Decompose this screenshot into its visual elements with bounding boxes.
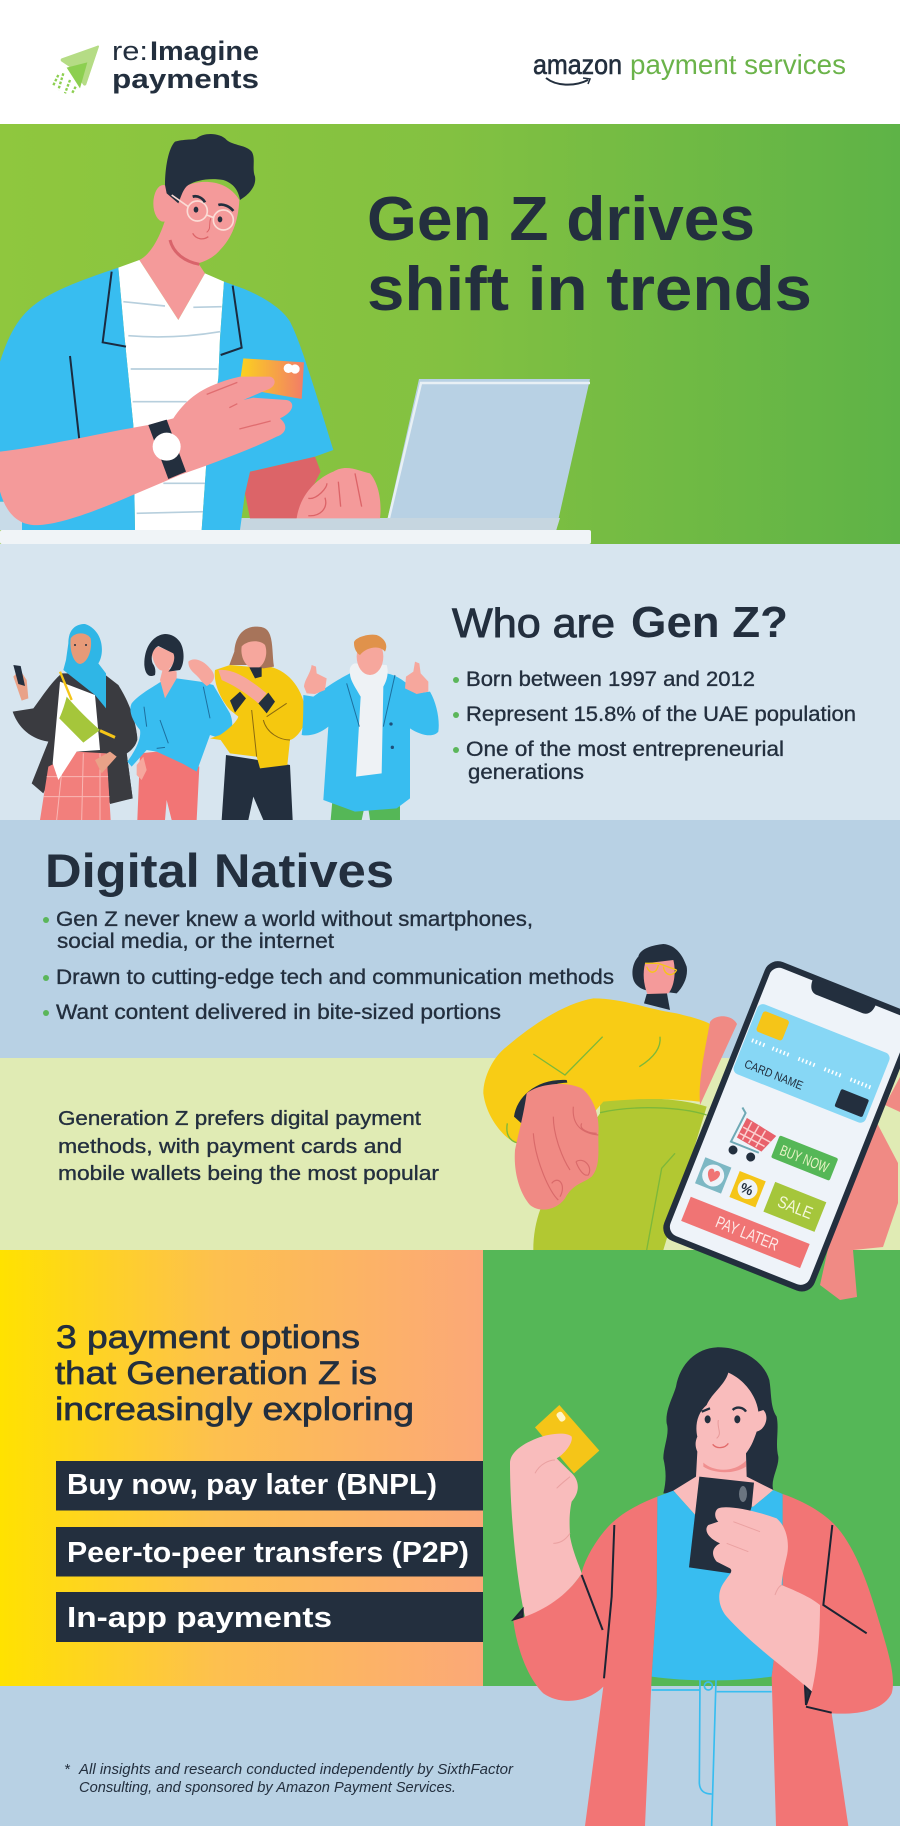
footnote: All insights and research conducted independently by SixthFactor [78,1761,514,1778]
option bar: in-app: In-app payments [67,1602,332,1634]
heading: digital natives: Digital Natives [45,844,394,897]
icon: percent badge [729,1171,766,1207]
heading: 3 payment options [55,1319,414,1427]
panel: who are gen z background [0,544,900,820]
logo: amazon payment services: amazon [533,49,622,80]
bullets: digital natives: Gen Z never knew a world without smartphones, [56,908,533,931]
green trousers [533,1098,707,1250]
logo: re:Imagine payments: re: [112,36,148,66]
neck and head [139,134,255,320]
person: blue jacket thumbs up [302,635,439,820]
striped t-shirt [118,260,224,530]
bullets: digital natives: Want content delivered in bite-sized portions [56,1001,501,1024]
button: buy now: BUY NOW [777,1142,831,1177]
option bar: BNPL: Buy now, pay later (BNPL) [67,1469,437,1501]
option bar: P2P [56,1527,483,1576]
illustration: group of four young people [13,624,439,820]
sweater details [507,1037,707,1250]
black phone [689,1477,754,1573]
face and neck [673,1373,773,1517]
icon: percent badge: % [738,1179,756,1199]
footnote [64,1761,514,1796]
person: black bob hair [127,634,232,820]
bullets: who are gen z: generations [468,761,584,784]
icon: heart tile [695,1157,731,1194]
yellow card [535,1405,599,1473]
smartphone [659,957,900,1296]
cardigan lines [514,1525,867,1713]
heading: who are gen z: Who are [452,600,615,646]
logo: re:Imagine payments: payments [112,64,259,94]
credit card on screen: CARD NAME [742,1057,805,1093]
logo: amazon payment services: payment services [630,49,846,80]
text block: digital payment preference: mobile wallets being the most popular [58,1163,439,1185]
panel: green hero [0,124,900,544]
blue top [652,1490,783,1680]
panel: green right [483,1250,900,1686]
far arm [245,457,321,518]
arm and hand [0,377,292,525]
hair [663,1347,778,1493]
typing hand [297,468,381,518]
footnote: * [64,1761,71,1778]
icon: green arrow [53,46,99,94]
heading: 3 payment options: 3 payment options [56,1319,360,1355]
illustration: person holding phone [483,944,900,1300]
hand on hip [515,1084,599,1210]
bullets: who are gen z: Born between 1997 and 2012 [466,668,755,691]
header band [0,0,900,124]
wrist band [514,1080,567,1127]
credit card on screen [732,1002,891,1125]
raised arm and hand [510,1434,582,1617]
shopping cart [725,1107,781,1167]
bullets: digital natives: social media, or the internet [57,930,334,953]
blue jacket [0,268,333,530]
heading: 3 payment options: increasingly exploring [55,1391,414,1427]
illustration: woman with card and phone [510,1347,893,1826]
payment card [240,358,304,399]
logo: amazon payment services [533,49,846,85]
jeans [652,1680,772,1826]
button: pay later [681,1197,810,1268]
panel: payment options gradient [0,1250,483,1686]
text block: digital payment preference [58,1108,439,1185]
hero title [367,185,812,324]
hero title: shift in trends [367,255,812,324]
person: hijab woman [13,624,137,820]
option bar: P2P: Peer-to-peer transfers (P2P) [67,1537,469,1569]
panel: digital natives background [0,820,900,1058]
heading: who are gen z: Gen Z? [631,598,788,647]
button: sale: SALE [775,1192,815,1223]
illustration: man with laptop and card [0,134,591,544]
bullets: who are gen z: One of the most entrepreneurial [466,738,784,761]
sleeve shadow patch [0,502,22,530]
panel: footer background [0,1686,900,1826]
logo: re:Imagine payments [53,36,259,94]
logo: re:Imagine payments: Imagine [150,36,259,66]
person: yellow jacket [210,627,306,820]
button: buy now [771,1135,838,1181]
button: sale [763,1182,826,1232]
hand and forearm with phone [706,1507,820,1692]
footnote: Consulting, and sponsored by Amazon Payment Services. [79,1779,456,1796]
heading: who are gen z [452,598,788,647]
head [632,944,687,1010]
yellow sweater [483,998,710,1143]
option bar: in-app [56,1592,483,1642]
bullets: digital natives: Drawn to cutting-edge tech and communication methods [56,966,614,989]
text block: digital payment preference: Generation Z prefers digital payment [58,1108,421,1130]
bullets: digital natives [43,908,614,1024]
laptop [0,379,591,544]
cardigan [513,1494,893,1826]
holding hand behind phone [700,1016,900,1300]
option bar: BNPL [56,1461,483,1510]
hero title: Gen Z drives [367,185,755,254]
bullets: who are gen z [453,668,856,784]
heading: 3 payment options: that Generation Z is [55,1355,377,1391]
text block: digital payment preference: methods, with payment cards and [58,1136,402,1158]
bullets: who are gen z: Represent 15.8% of the UAE population [466,703,856,726]
button: pay later: PAY LATER [713,1213,781,1255]
wristwatch [148,420,186,479]
panel: digital payments background [0,1058,900,1250]
